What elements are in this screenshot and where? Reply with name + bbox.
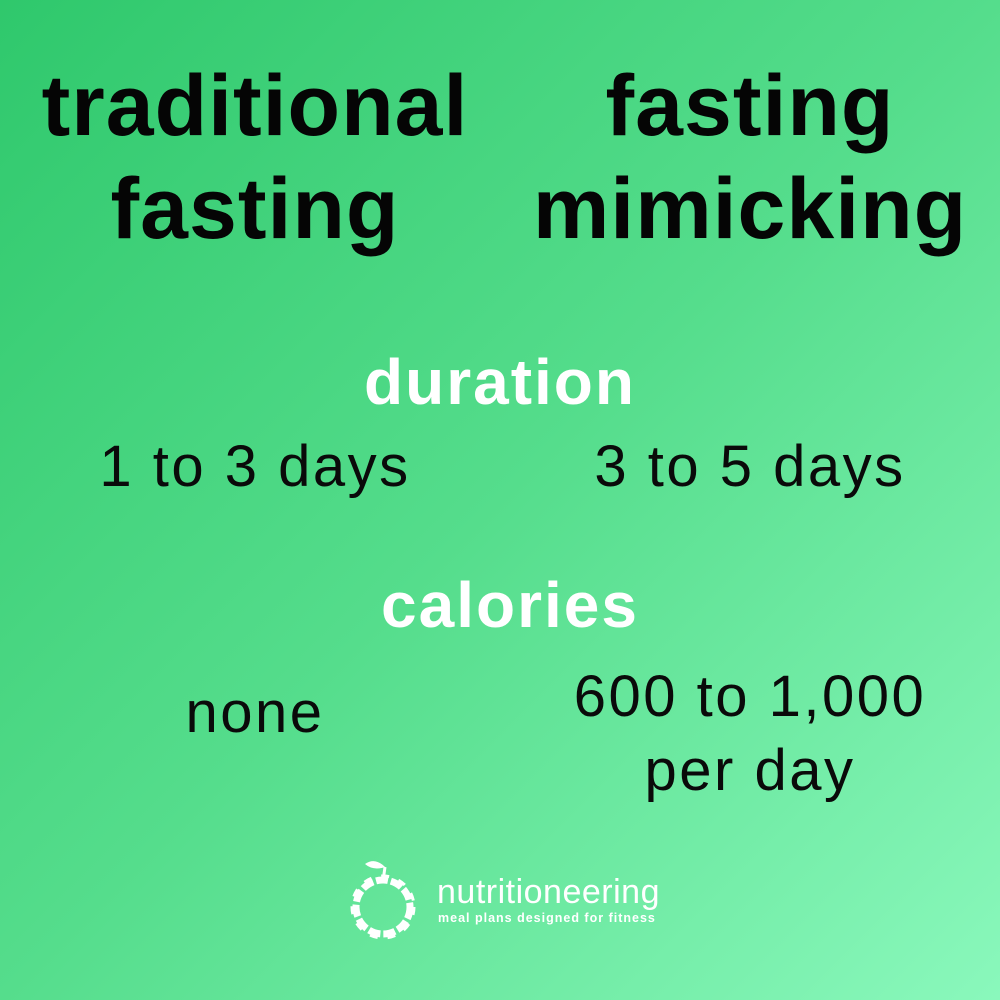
title: fasting mimicking: mimicking bbox=[533, 161, 967, 257]
heading: duration: duration bbox=[364, 346, 636, 418]
title: traditional fasting: traditional bbox=[42, 58, 468, 154]
title: traditional fasting bbox=[42, 58, 468, 257]
text: mimicking duration: 3 to 5 days bbox=[594, 434, 906, 499]
text: mimicking calories bbox=[574, 664, 926, 803]
text: traditional duration: 1 to 3 days bbox=[99, 434, 411, 499]
heading: calories: calories bbox=[381, 569, 639, 641]
logo: nutritioneering bbox=[350, 861, 660, 940]
text: mimicking calories: 600 to 1,000 bbox=[574, 664, 926, 729]
text: mimicking calories: per day bbox=[645, 738, 855, 803]
title: traditional fasting: fasting bbox=[111, 161, 399, 257]
icon: apple gear bbox=[350, 861, 416, 940]
title: fasting mimicking bbox=[533, 58, 967, 257]
title: fasting mimicking: fasting bbox=[606, 58, 894, 154]
text: brand name: nutritioneering bbox=[437, 873, 660, 911]
text: tagline: meal plans designed for fitness bbox=[438, 911, 656, 925]
text: traditional calories: none bbox=[185, 680, 325, 745]
